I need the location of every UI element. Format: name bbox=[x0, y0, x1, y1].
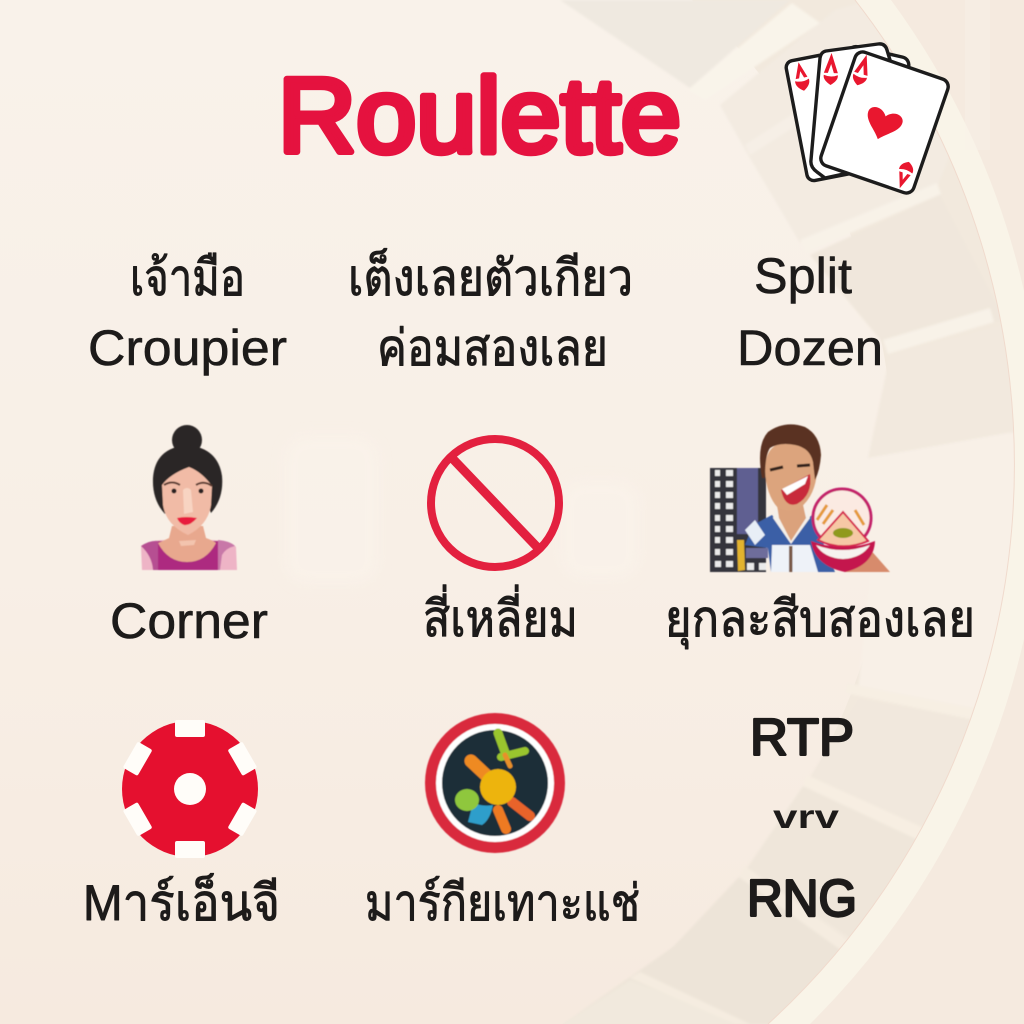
text: Dozen: Dozen bbox=[737, 320, 883, 376]
text: RTP: RTP bbox=[750, 709, 854, 767]
text: เต็งเลยตัวเกียว: เต็งเลยตัวเกียว bbox=[348, 248, 633, 306]
text: Mาร์เอ็นจี: Mาร์เอ็นจี bbox=[83, 873, 280, 931]
text: ค่อมสองเลย: ค่อมสองเลย bbox=[377, 320, 608, 376]
background: roulette wheel bbox=[614, 0, 1015, 1024]
text: Corner: Corner bbox=[110, 593, 268, 649]
text: squiggle glyphs: vrv bbox=[773, 798, 840, 835]
text: สี่เหลี่ยม: สี่เหลี่ยม bbox=[423, 585, 578, 647]
text: ยุกละสีบสองเลย: ยุกละสีบสองเลย bbox=[665, 591, 975, 649]
title: Roulette bbox=[278, 57, 681, 175]
text: เจ้ามือ: เจ้ามือ bbox=[130, 250, 245, 306]
icon: croupier woman bbox=[141, 425, 237, 570]
text: Croupier: Croupier bbox=[88, 320, 287, 376]
icon: man with chip stacks and cake bbox=[710, 424, 890, 572]
icon: roulette wheel medallion bbox=[425, 713, 565, 853]
text: Split: Split bbox=[754, 248, 852, 304]
icon: casino chip bbox=[122, 720, 258, 858]
icon: playing cards bbox=[785, 44, 950, 195]
text: มาร์กียเทาะแช่: มาร์กียเทาะแช่ bbox=[365, 875, 640, 931]
icon: prohibited sign bbox=[431, 439, 559, 567]
text: RNG: RNG bbox=[747, 870, 857, 928]
